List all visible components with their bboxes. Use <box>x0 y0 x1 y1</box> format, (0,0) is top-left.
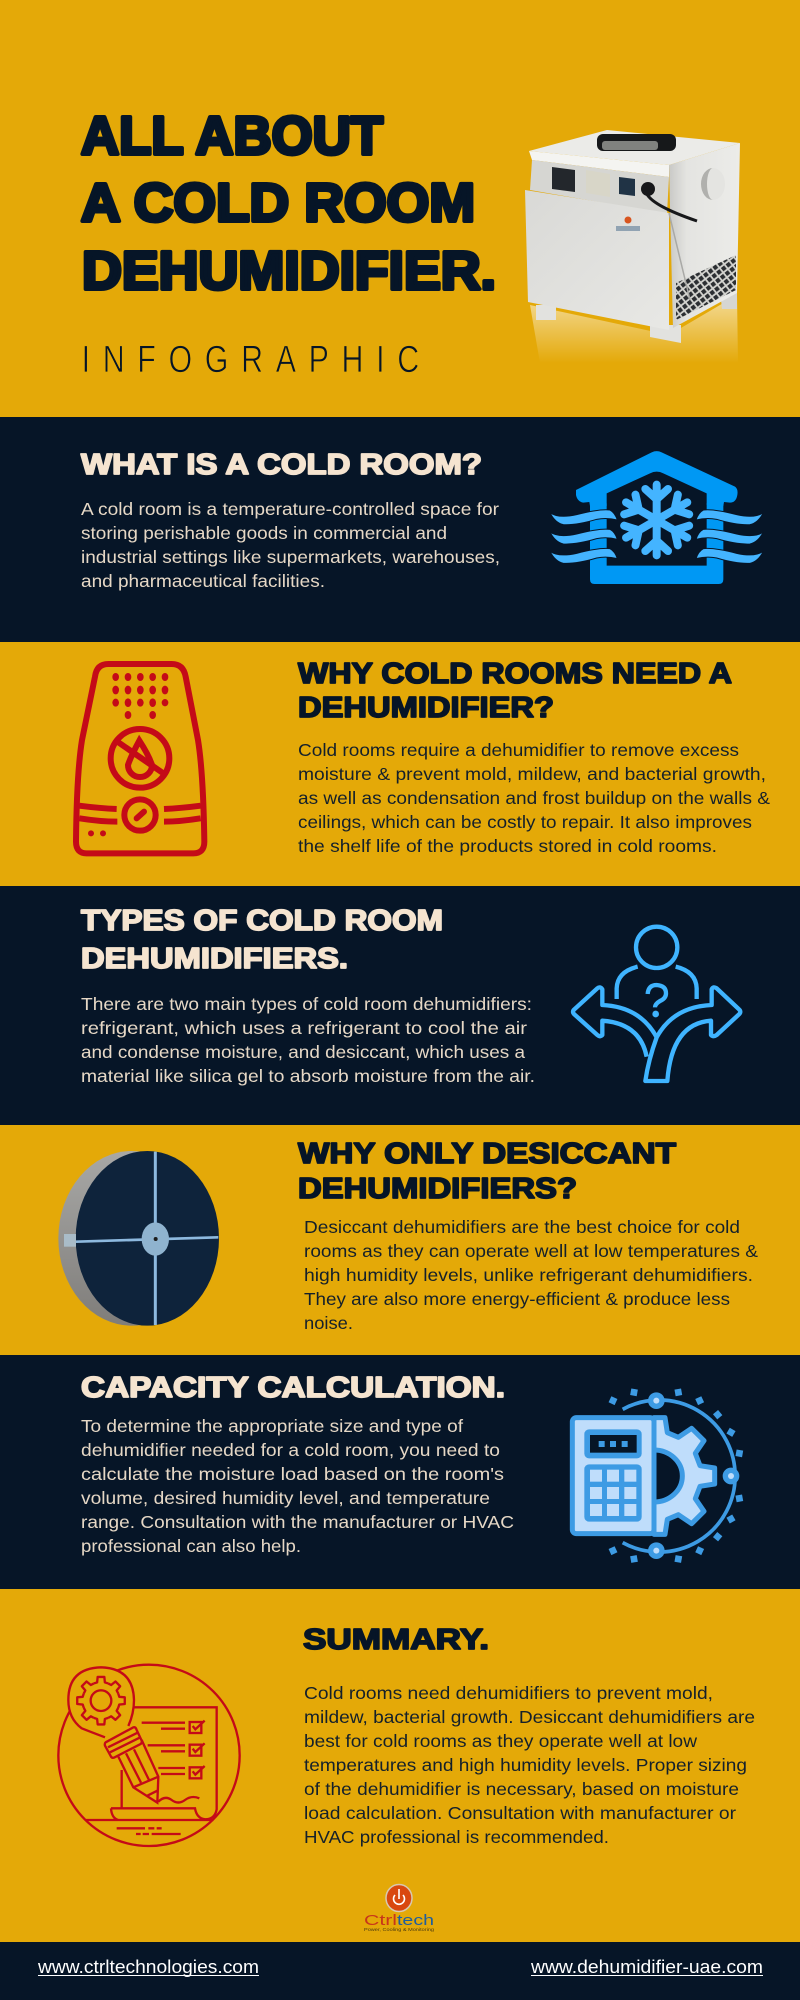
link: ctrltechnologies: www.ctrltechnologies.com <box>37 1957 259 1977</box>
body text <box>81 1416 514 1556</box>
body text: moisture & prevent mold, mildew, and bacterial growth, <box>298 764 766 784</box>
body text: To determine the appropriate size and type of <box>81 1416 463 1436</box>
heading: DEHUMIDIFIERS. <box>81 943 348 975</box>
panel: footer <box>0 1942 800 2000</box>
body text: range. Consultation with the manufacturer or HVAC <box>81 1512 514 1532</box>
link: dehumidifier-uae: www.dehumidifier-uae.com <box>530 1957 763 1977</box>
panel: header <box>0 0 800 417</box>
body text <box>81 499 500 591</box>
panel: types of cold room dehumidifiers <box>0 886 800 1125</box>
heading: DEHUMIDIFIERS? <box>298 1173 577 1205</box>
logo: Ctrltech: Power, Cooling & Monitoring <box>364 1927 435 1932</box>
body text: of the dehumidifier is necessary, based on moisture <box>304 1779 739 1799</box>
body text: industrial settings like supermarkets, warehouses, <box>81 547 500 567</box>
title: A COLD ROOM <box>81 173 475 233</box>
body text: and condense moisture, and desiccant, which uses a <box>81 1042 525 1062</box>
body text <box>81 994 535 1086</box>
title <box>81 106 496 301</box>
heading: SUMMARY. <box>303 1624 489 1656</box>
body text: rooms as they can operate well at low temperatures & <box>304 1241 758 1261</box>
heading: WHY COLD ROOMS NEED A <box>298 658 732 690</box>
body text: Desiccant dehumidifiers are the best choice for cold <box>304 1217 740 1237</box>
heading: CAPACITY CALCULATION. <box>81 1372 505 1404</box>
subtitle: INFOGRAPHIC <box>82 339 419 381</box>
title: ALL ABOUT <box>81 106 383 166</box>
body text: dehumidifier needed for a cold room, you need to <box>81 1440 500 1460</box>
heading: DEHUMIDIFIER? <box>298 692 554 724</box>
icon: snowflake house <box>550 451 763 584</box>
body text: load calculation. Consultation with manufacturer or <box>304 1803 736 1823</box>
product photo: dehumidifier <box>525 130 740 363</box>
body text: material like silica gel to absorb moisture from the air. <box>81 1066 535 1086</box>
body text: professional can also help. <box>81 1536 301 1556</box>
body text: calculate the moisture load based on the room's <box>81 1464 504 1484</box>
body text: and pharmaceutical facilities. <box>81 571 325 591</box>
body text: They are also more energy-efficient & produce less <box>304 1289 730 1309</box>
icon: dehumidifier no water <box>76 664 204 853</box>
title: DEHUMIDIFIER. <box>82 241 496 301</box>
body text <box>298 740 770 856</box>
panel: why only desiccant dehumidifiers <box>0 1125 800 1355</box>
heading: WHAT IS A COLD ROOM? <box>81 449 482 481</box>
body text: mildew, bacterial growth. Desiccant dehumidifiers are <box>304 1707 755 1727</box>
logo: Ctrltech: Ctrl <box>364 1912 397 1929</box>
body text: Cold rooms need dehumidifiers to prevent mold, <box>304 1683 713 1703</box>
image: desiccant rotor wheel <box>58 1151 219 1326</box>
body text: storing perishable goods in commercial and <box>81 523 447 543</box>
body text: the shelf life of the products stored in cold rooms. <box>298 836 717 856</box>
panel: summary <box>0 1589 800 1942</box>
heading <box>298 1138 677 1205</box>
body text: Cold rooms require a dehumidifier to remove excess <box>298 740 739 760</box>
icon: idea checklist <box>58 1665 240 1846</box>
logo: Ctrltech <box>364 1884 435 1932</box>
body text: refrigerant, which uses a refrigerant to cool the air <box>81 1018 527 1038</box>
heading: WHY ONLY DESICCANT <box>298 1138 677 1170</box>
panel: what is a cold room <box>0 417 800 642</box>
body text: There are two main types of cold room dehumidifiers: <box>81 994 532 1014</box>
body text: best for cold rooms as they operate well at low <box>304 1731 697 1751</box>
icon: person choosing direction <box>573 927 740 1081</box>
body text: noise. <box>304 1313 353 1333</box>
body text <box>304 1683 755 1847</box>
body text <box>304 1217 758 1333</box>
body text: ceilings, which can be costly to repair. It also improves <box>298 812 752 832</box>
panel: capacity calculation <box>0 1355 800 1589</box>
panel: why cold rooms need a dehumidifier <box>0 642 800 886</box>
body text: high humidity levels, unlike refrigerant dehumidifiers. <box>304 1265 753 1285</box>
heading <box>81 905 443 975</box>
heading: TYPES OF COLD ROOM <box>81 905 443 937</box>
body text: temperatures and high humidity levels. Proper sizing <box>304 1755 747 1775</box>
body text: volume, desired humidity level, and temperature <box>81 1488 490 1508</box>
icon: calculator and gear <box>572 1388 743 1563</box>
logo: Ctrltech: tech <box>397 1912 434 1929</box>
body text: as well as condensation and frost buildup on the walls & <box>298 788 770 808</box>
body text: HVAC professional is recommended. <box>304 1827 609 1847</box>
body text: A cold room is a temperature-controlled space for <box>81 499 499 519</box>
heading <box>298 658 732 724</box>
